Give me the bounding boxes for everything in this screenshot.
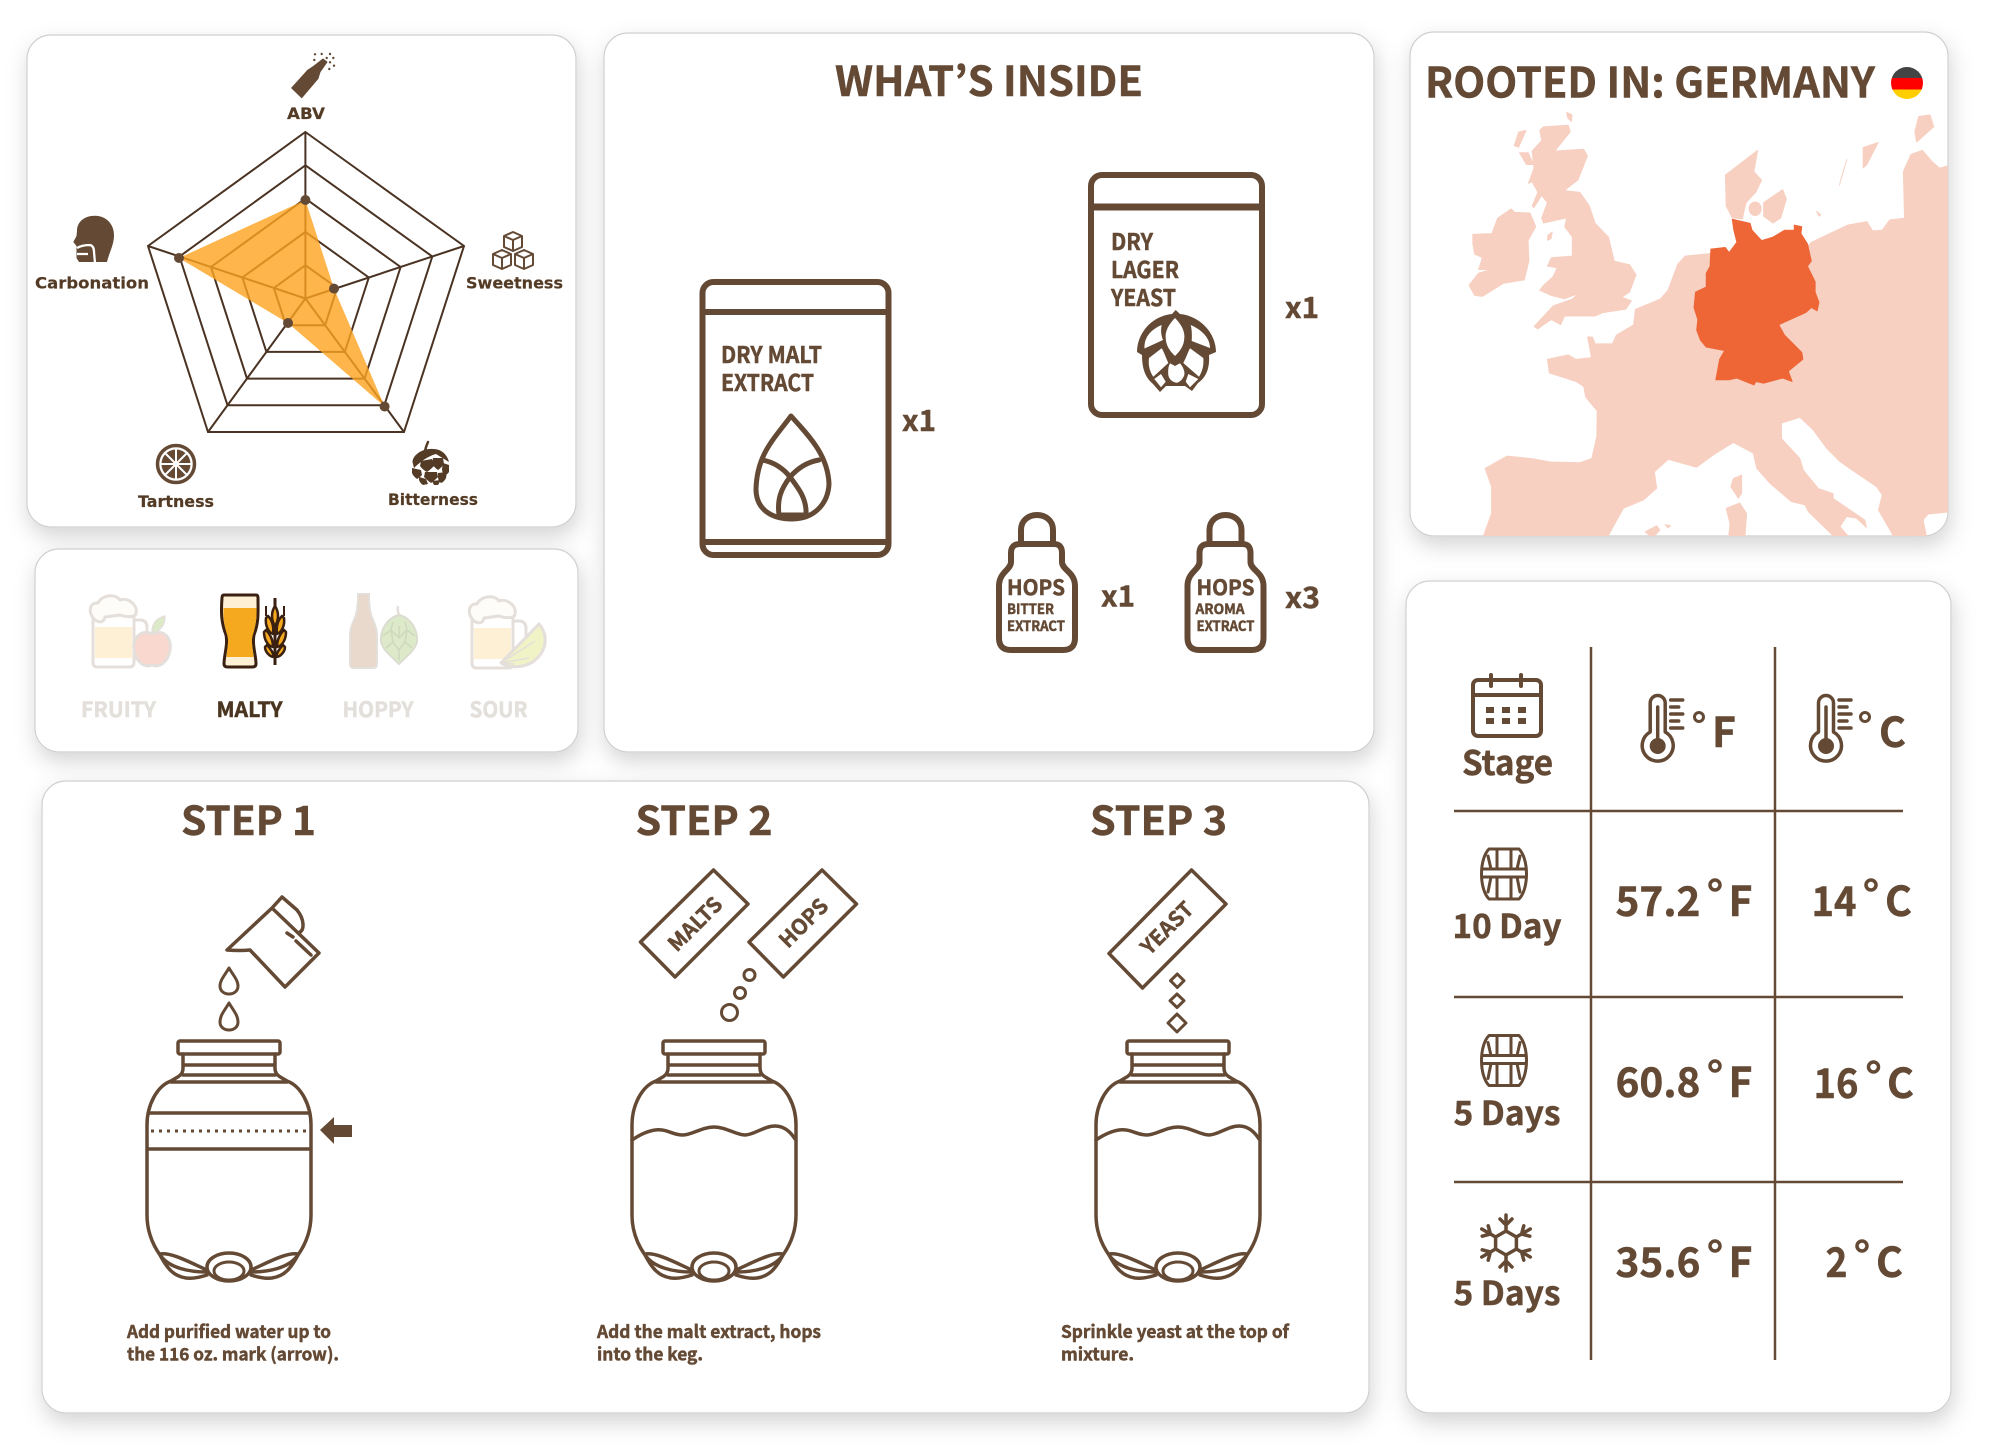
- value: 35.6 F: [1616, 1229, 1752, 1289]
- value: 14 C: 14: [1812, 868, 1856, 928]
- step 1 instructions: the 116 oz. mark (arrow).: [127, 1342, 339, 1366]
- label: SOUR: SOUR: [470, 694, 528, 724]
- icon: snowflake: [1479, 1215, 1533, 1271]
- label: dry lager yeast: YEAST: [1110, 279, 1176, 313]
- value: 16 C: C: [1887, 1050, 1914, 1110]
- label: Sweetness: Sweetness: [466, 274, 563, 292]
- icon: keg with liquid: [1096, 1041, 1260, 1281]
- icon: pouring jug: [227, 897, 319, 987]
- label: Tartness: Tartness: [138, 492, 214, 511]
- icon: head and throat (carbonation): [73, 216, 114, 263]
- value: 16 C: 16: [1814, 1050, 1858, 1110]
- label: hops bitter extract: EXTRACT: [1007, 616, 1065, 636]
- step 1 instructions: Add purified water up to: [126, 1319, 331, 1344]
- icon: calendar: [1473, 675, 1541, 736]
- step 3 instructions: Sprinkle yeast at the top of: [1061, 1319, 1290, 1344]
- icon: yeast packet: YEAST: [1133, 894, 1200, 962]
- label: Carbonation: Carbonation: [35, 274, 149, 292]
- label: HOPPY: HOPPY: [342, 694, 414, 724]
- heading: degrees F: [1694, 699, 1736, 759]
- icon: hops packet: HOPS: [772, 891, 835, 954]
- panel: brewing steps: [42, 781, 1369, 1413]
- value: 16 C: [1814, 1050, 1914, 1110]
- arrow: fill mark: [320, 1117, 352, 1144]
- label: MALTY: MALTY: [216, 694, 283, 724]
- label: hops bitter extract: HOPS: [1007, 572, 1065, 602]
- panel: fermentation table: [1406, 581, 1951, 1413]
- label: quantity x1 malt: x1: [902, 398, 936, 440]
- heading: Stage: Stage: [1462, 736, 1553, 785]
- icon: yeast granules: [1168, 974, 1186, 1032]
- label: FRUITY: FRUITY: [81, 694, 157, 724]
- heading: degrees F: F: [1712, 699, 1736, 759]
- icon: bottle and hop (hoppy): [350, 594, 417, 668]
- icon: hops bitter extract bottle: [999, 515, 1075, 650]
- value: 60.8 F: F: [1728, 1049, 1752, 1109]
- panel: flavour radar chart: [27, 35, 576, 527]
- radar chart: [148, 132, 464, 432]
- label: quantity x3: x3: [1285, 575, 1320, 617]
- row: cold crash stage: [1454, 1215, 1903, 1315]
- icon: German flag: [1891, 67, 1923, 99]
- value: 2 C: C: [1876, 1229, 1903, 1289]
- icon: hops packet: [749, 870, 856, 977]
- value: 2 C: 2: [1826, 1229, 1848, 1289]
- label: hops aroma extract: HOPS: [1196, 572, 1254, 602]
- panel: beer style selector: [35, 549, 578, 752]
- label: 10 Day: 10 Day: [1452, 900, 1562, 948]
- value: 14 C: C: [1885, 868, 1912, 928]
- icon: beer mug with apple (fruity): [90, 596, 170, 667]
- panel: rooted in Germany: [1410, 32, 1951, 540]
- label: hops aroma extract: EXTRACT: [1196, 616, 1255, 636]
- icon: malt drop: [756, 416, 829, 519]
- icon: bubbles: [722, 970, 755, 1020]
- value: 60.8 F: 60.8: [1616, 1049, 1700, 1109]
- label: dry lager yeast: LAGER: [1111, 251, 1179, 285]
- icon: hop cone (bitterness): [412, 442, 449, 485]
- icon: sugar cubes (sweetness): [493, 232, 533, 269]
- value: 35.6 F: 35.6: [1616, 1229, 1700, 1289]
- title: what's inside: WHAT’S INSIDE: [835, 48, 1143, 108]
- step 3: [1061, 789, 1290, 1366]
- icon: hops aroma extract bottle: [1188, 515, 1264, 650]
- panel: what's inside: [604, 33, 1374, 752]
- step 2 instructions: Add the malt extract, hops: [596, 1319, 821, 1344]
- icon: yeast packet: [1109, 870, 1226, 988]
- label: hops aroma extract: AROMA: [1195, 599, 1246, 619]
- icon: bottle popping (ABV): [292, 53, 335, 98]
- map of western Europe: [1469, 112, 1951, 540]
- value: 57.2 F: [1616, 868, 1752, 928]
- label: Bitterness: Bitterness: [388, 490, 478, 509]
- heading: degrees C: [1860, 699, 1906, 759]
- value: 57.2 F: 57.2: [1616, 868, 1700, 928]
- label: ABV: ABV: [287, 104, 326, 123]
- icon: barrel: [1482, 849, 1526, 899]
- icon: thermometer Fahrenheit: [1642, 696, 1683, 761]
- step 3 instructions: mixture.: [1061, 1342, 1134, 1366]
- heading: step 2: STEP 2: [636, 789, 772, 847]
- icon: dry lager yeast bag: [1091, 175, 1262, 415]
- Germany highlighted: [1694, 219, 1819, 385]
- icon: citrus slice (tartness): [158, 446, 194, 482]
- icon: beer mug with lime (sour): [469, 597, 545, 668]
- label: 5 Days: 5 Days: [1454, 1087, 1560, 1135]
- value: 35.6 F: F: [1728, 1229, 1752, 1289]
- icon: water drops: [220, 968, 238, 1030]
- label: dry malt extract: DRY MALT: [721, 336, 822, 370]
- label: quantity x1 yeast: x1: [1285, 285, 1319, 327]
- label: 5 Days: 5 Days: [1454, 1267, 1560, 1315]
- value: 60.8 F: [1616, 1049, 1752, 1109]
- icon: pint glass and wheat (malty): [221, 595, 286, 667]
- label: hops bitter extract: BITTER: [1007, 599, 1054, 619]
- icon: keg with liquid: [632, 1041, 796, 1281]
- heading: step 3: STEP 3: [1090, 789, 1227, 847]
- step 2 instructions: into the keg.: [597, 1342, 703, 1366]
- icon: barrel: [1482, 1036, 1526, 1086]
- step 2: [596, 789, 856, 1366]
- label: quantity x1 bitter: x1: [1101, 574, 1135, 616]
- icon: hop outline: [1137, 310, 1216, 392]
- heading: degrees C: C: [1879, 699, 1906, 759]
- title: rooted in Germany: ROOTED IN: GERMANY: [1425, 50, 1876, 110]
- icon: malts packet: [640, 870, 748, 977]
- value: 14 C: [1812, 868, 1912, 928]
- label: dry lager yeast: DRY: [1111, 223, 1154, 257]
- row: 10 day stage: [1452, 849, 1912, 948]
- value: 57.2 F: F: [1728, 868, 1752, 928]
- heading: step 1: STEP 1: [181, 789, 316, 847]
- row: 5 days stage: [1454, 1036, 1914, 1135]
- icon: keg with fill mark: [147, 1041, 311, 1281]
- icon: thermometer Celsius: [1810, 696, 1851, 761]
- icon: malts packet: MALTS: [661, 890, 729, 958]
- step 1: [126, 789, 352, 1366]
- value: 2 C: [1826, 1229, 1903, 1289]
- icon: dry malt extract bag: [702, 282, 888, 555]
- label: dry malt extract: EXTRACT: [721, 364, 814, 398]
